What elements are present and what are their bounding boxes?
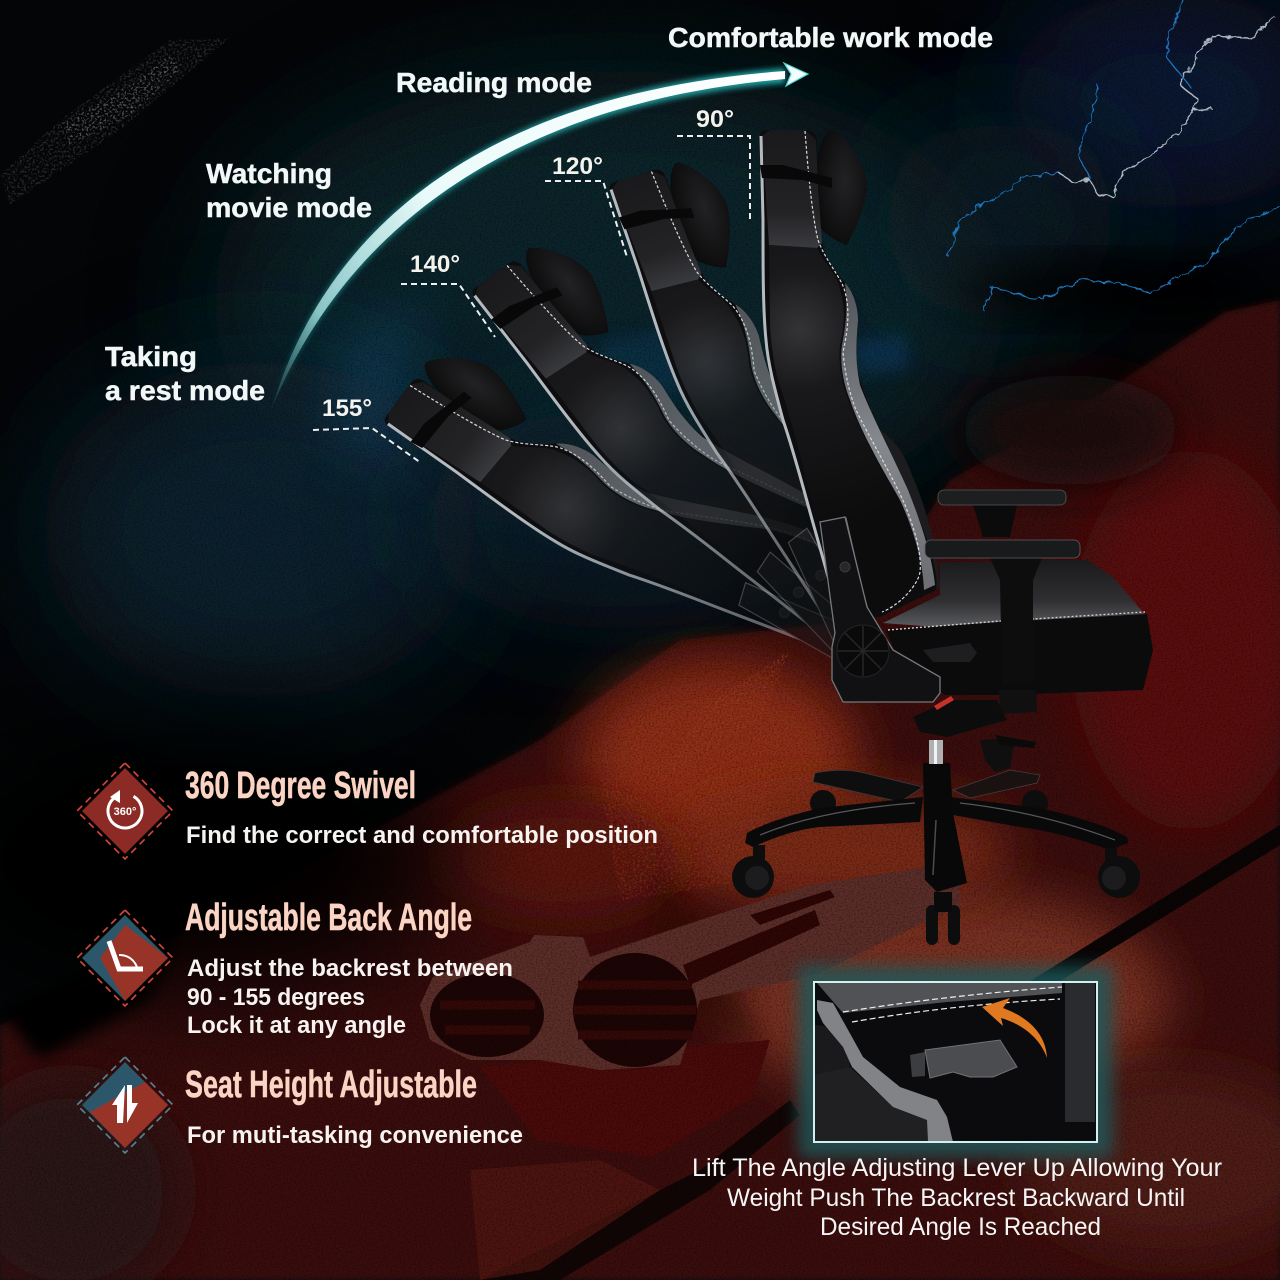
icon: seat height xyxy=(77,1057,173,1153)
heading: seat height: Seat Height Adjustable xyxy=(185,1064,477,1106)
chair: seat xyxy=(883,560,1153,695)
lightning xyxy=(948,0,1280,310)
chair: backrest positions xyxy=(384,162,834,658)
background: red painted area xyxy=(0,300,1280,1280)
mode label: taking a rest: Taking xyxy=(105,341,197,372)
chair: armrests xyxy=(925,490,1080,714)
chair: tilt mechanism xyxy=(913,696,1036,772)
caption: lever instruction: Desired Angle Is Reached xyxy=(820,1213,1101,1241)
caption: lever instruction xyxy=(692,1154,1222,1241)
text: back angle description xyxy=(187,955,513,1039)
chair: base and casters xyxy=(732,740,1140,945)
angle marker 90 xyxy=(677,106,750,219)
caption: lever instruction: Lift The Angle Adjusting Lever Up Allowing Your xyxy=(692,1154,1222,1182)
angle marker 120 xyxy=(545,153,627,257)
icon: back angle xyxy=(77,910,173,1006)
text: seat height description: For muti-tasking convenience xyxy=(187,1122,523,1149)
angle marker 155: 155° xyxy=(322,395,372,422)
angle marker 155 xyxy=(313,395,421,463)
inset: lever close-up xyxy=(780,966,1113,1158)
text: swivel description: Find the correct and comfortable position xyxy=(186,822,658,849)
mode label: comfortable work: Comfortable work mode xyxy=(668,22,993,53)
heading: back angle: Adjustable Back Angle xyxy=(185,897,472,939)
arc arrow across recline modes xyxy=(272,63,808,408)
heading: swivel: 360 Degree Swivel xyxy=(185,765,416,807)
text: back angle description: 90 - 155 degrees xyxy=(187,984,365,1011)
mode label: taking a rest: a rest mode xyxy=(105,375,265,406)
angle marker 90: 90° xyxy=(696,106,734,133)
icon: 360 swivel: 360° xyxy=(114,806,136,818)
mode label: watching movie xyxy=(206,158,372,223)
background: gun barrels xyxy=(420,862,960,1280)
angle marker 140: 140° xyxy=(410,251,460,278)
text: back angle description: Adjust the backrest between xyxy=(187,955,513,982)
icon: 360 swivel xyxy=(77,763,173,859)
mode label: taking a rest xyxy=(105,341,265,406)
caption: lever instruction: Weight Push The Backrest Backward Until xyxy=(727,1184,1185,1212)
mode label: watching movie: movie mode xyxy=(206,192,372,223)
chair: upright backrest and side bracket xyxy=(760,130,940,702)
text: back angle description: Lock it at any angle xyxy=(187,1012,406,1039)
mode label: watching movie: Watching xyxy=(206,158,332,189)
angle marker 140 xyxy=(401,251,495,337)
angle marker 120: 120° xyxy=(552,153,603,180)
mode label: reading: Reading mode xyxy=(396,67,592,98)
